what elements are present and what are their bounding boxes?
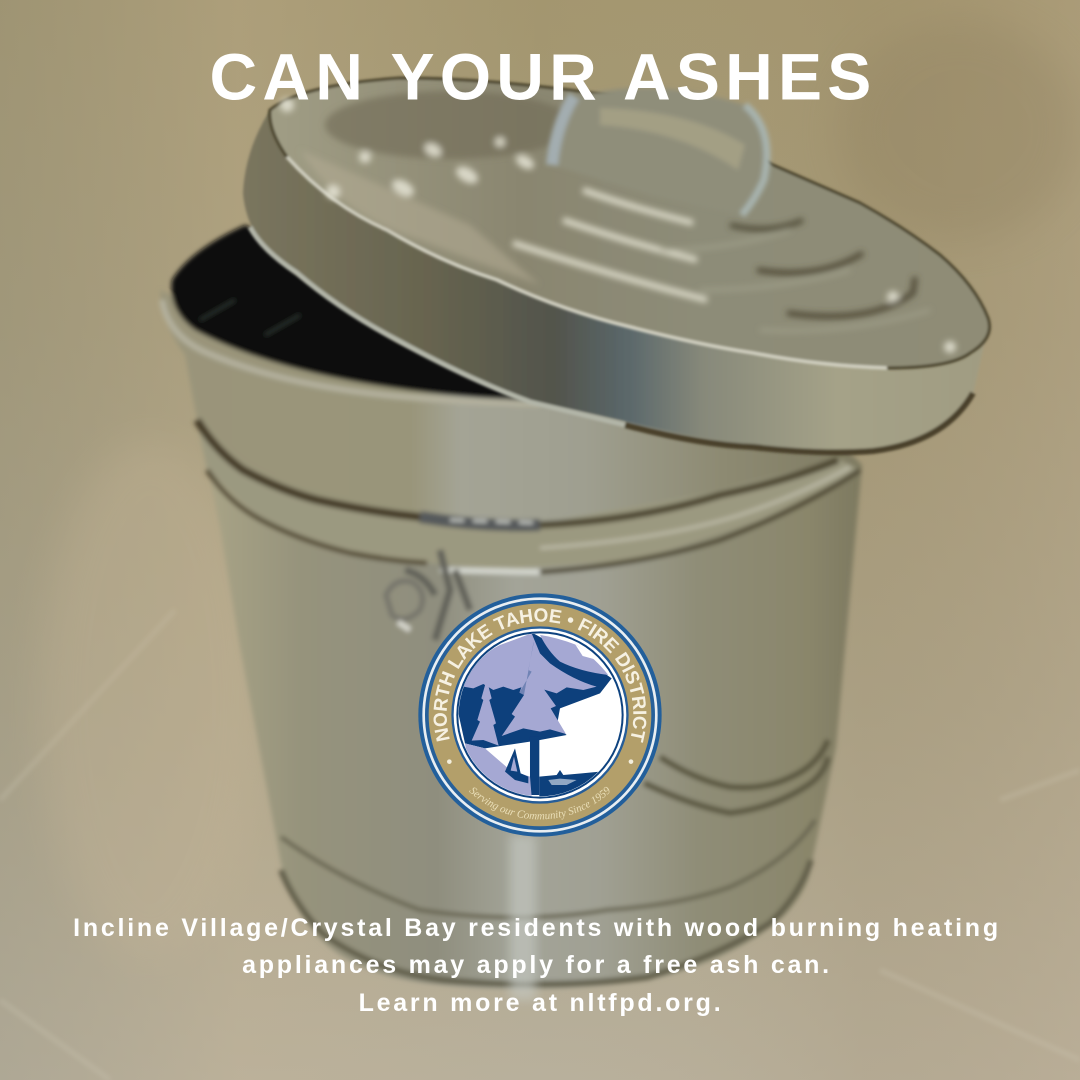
can body xyxy=(160,225,862,989)
lid handle xyxy=(552,88,767,215)
photo: metal ash can xyxy=(160,78,990,1000)
logo: North Lake Tahoe Fire District seal xyxy=(418,593,662,837)
seal rings xyxy=(418,593,662,837)
body text: Learn more at nltfpd.org. xyxy=(359,989,723,1017)
lid xyxy=(243,78,990,452)
body text: Incline Village/Crystal Bay residents with wood burning heating xyxy=(73,914,1001,942)
lid top xyxy=(270,78,990,368)
seal dots xyxy=(447,759,633,764)
lid shading and glints xyxy=(280,91,956,353)
seal text: motto: Serving our Community Since 1959 xyxy=(469,786,610,820)
lid band xyxy=(243,110,985,452)
seal illustration: mountain and pines xyxy=(457,633,612,800)
can highlight xyxy=(510,835,536,1000)
title: CAN YOUR ASHES xyxy=(210,40,876,114)
body text: appliances may apply for a free ash can. xyxy=(242,951,832,979)
body text xyxy=(73,914,1001,1017)
can opening xyxy=(171,225,530,400)
hoop bands xyxy=(197,420,420,517)
handle clasp xyxy=(386,581,423,619)
seal text: district name: NORTH LAKE TAHOE • FIRE DISTRICT xyxy=(434,608,646,743)
